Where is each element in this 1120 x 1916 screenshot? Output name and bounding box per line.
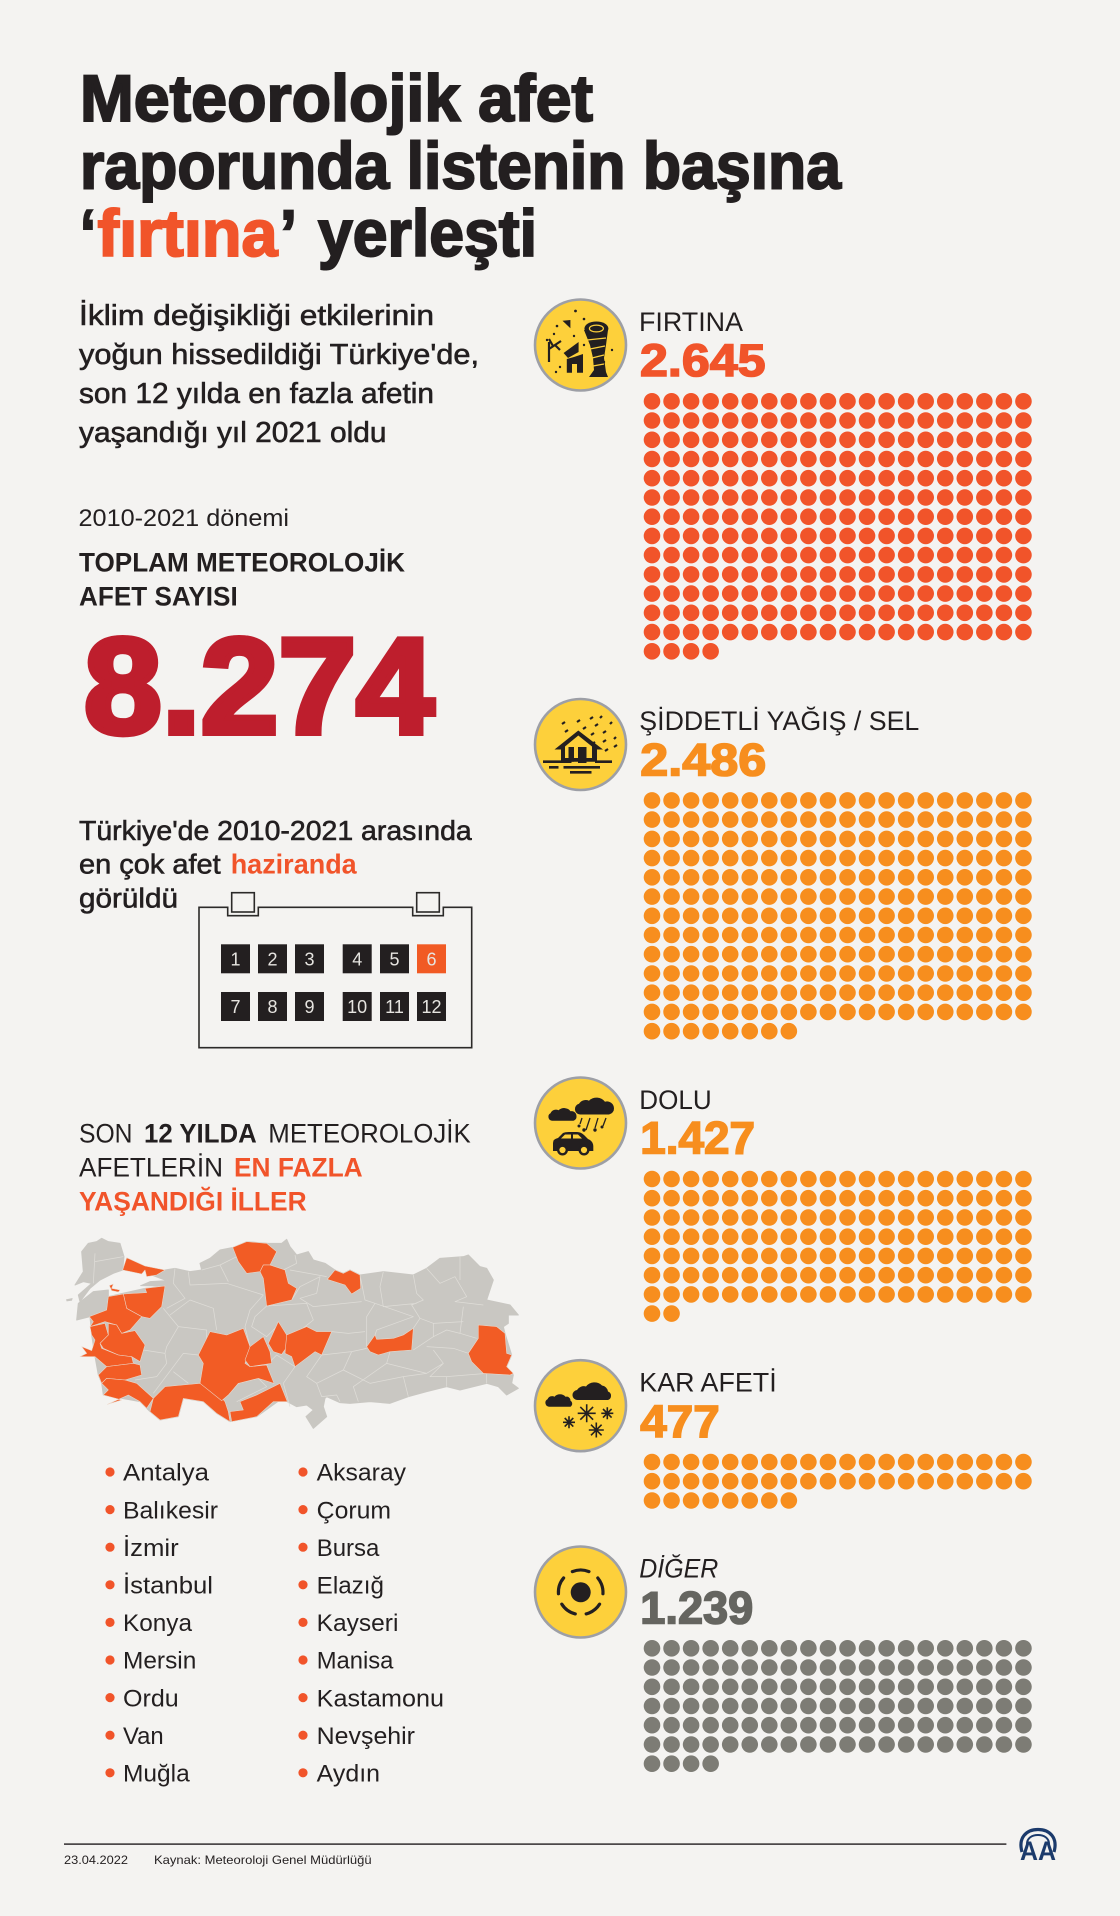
intro text block [79, 299, 479, 449]
label: storm: 2.645 [640, 335, 766, 386]
provinces list column 2: Manisa [317, 1648, 394, 1675]
june text block: görüldü [79, 882, 178, 913]
provinces heading: 12 YILDA [144, 1118, 257, 1148]
calendar: 5 [389, 949, 400, 969]
footer [64, 1843, 1006, 1867]
provinces list column 1: Balıkesir [123, 1497, 218, 1524]
provinces list column 1: İzmir [123, 1535, 179, 1562]
map of Turkey [66, 1238, 518, 1428]
provinces list column 1: Konya [123, 1610, 193, 1637]
label: heavy rain [639, 705, 919, 786]
label: other: DİĞER [639, 1552, 718, 1583]
title: ‘ [80, 196, 96, 270]
provinces heading: YAŞANDIĞI İLLER [79, 1186, 307, 1217]
provinces list column 2: Aydın [317, 1760, 380, 1788]
title: raporunda listenin başına [80, 128, 842, 202]
label: other [639, 1552, 753, 1634]
label: hail: DOLU [639, 1085, 712, 1115]
provinces heading: SON [79, 1118, 132, 1148]
provinces list column 1: Van [123, 1723, 164, 1750]
dot chart: other [652, 1648, 1024, 1764]
label: snow: 477 [640, 1396, 720, 1447]
provinces list column 1 [105, 1460, 218, 1788]
intro text block: yaşandığı yıl 2021 oldu [79, 417, 386, 449]
title: yerleşti [318, 196, 537, 270]
total heading: AFET SAYISI [79, 582, 238, 612]
calendar: 11 [385, 997, 404, 1017]
calendar: 1 [230, 949, 241, 969]
label: other: 1.239 [640, 1582, 753, 1634]
provinces list column 1: İstanbul [123, 1572, 213, 1600]
title: fırtına [98, 196, 279, 270]
label: storm [639, 307, 766, 386]
label: hail [639, 1085, 755, 1164]
logo: AA [1020, 1836, 1056, 1866]
label: snow [639, 1367, 777, 1447]
dot chart: storm [652, 401, 1024, 651]
dot chart: heavy rain [652, 800, 1024, 1031]
provinces list column 2: Nevşehir [317, 1723, 415, 1750]
calendar: 10 [347, 997, 367, 1017]
icon: flood house [535, 699, 626, 790]
provinces list column 1: Mersin [123, 1648, 196, 1675]
footer: Kaynak: Meteoroloji Genel Müdürlüğü [154, 1853, 372, 1867]
dot chart: snow [652, 1462, 1024, 1500]
total number: 8.274 [84, 610, 434, 762]
provinces list column 2: Aksaray [317, 1460, 406, 1487]
provinces list column 1: Muğla [123, 1760, 190, 1788]
calendar: 4 [352, 949, 362, 969]
calendar: 3 [304, 949, 315, 969]
icon: hail [535, 1078, 626, 1168]
calendar: 6 [426, 949, 437, 969]
provinces list column 2: Kayseri [317, 1610, 398, 1637]
period label: 2010-2021 dönemi [78, 505, 289, 532]
provinces heading: METEOROLOJİK [268, 1117, 471, 1148]
title [80, 61, 842, 270]
provinces list column 1: Ordu [123, 1685, 179, 1712]
intro text block: İklim değişikliği etkilerinin [79, 299, 434, 332]
provinces heading: EN FAZLA [234, 1153, 363, 1183]
label: hail: 1.427 [640, 1112, 755, 1164]
total heading [79, 548, 405, 612]
title: ’ [280, 196, 297, 270]
calendar: 12 [421, 997, 442, 1017]
provinces list column 1: Antalya [123, 1460, 210, 1487]
footer: 23.04.2022 [64, 1853, 128, 1867]
provinces heading [79, 1117, 471, 1217]
june text block [79, 815, 472, 913]
calendar [199, 893, 472, 1048]
calendar: 7 [230, 997, 241, 1017]
intro text block: son 12 yılda en fazla afetin [79, 378, 434, 410]
total heading: TOPLAM METEOROLOJİK [79, 548, 405, 578]
label: heavy rain: ŞİDDETLİ YAĞIŞ / SEL [639, 705, 919, 736]
icon: snow [535, 1360, 626, 1451]
provinces list column 2: Bursa [317, 1535, 380, 1562]
provinces list column 2: Elazığ [317, 1572, 384, 1600]
june text block: Türkiye'de 2010-2021 arasında [79, 815, 472, 846]
provinces list column 2: Kastamonu [317, 1685, 444, 1712]
intro text block: yoğun hissedildiği Türkiye'de, [79, 339, 479, 371]
icon: other [535, 1546, 626, 1638]
calendar: 2 [267, 949, 278, 969]
june text block: en çok afet [79, 848, 221, 879]
provinces list column 2: Çorum [317, 1497, 391, 1524]
label: heavy rain: 2.486 [640, 734, 766, 786]
calendar: 9 [304, 997, 315, 1017]
calendar: 8 [267, 997, 278, 1017]
june text block: haziranda [231, 848, 357, 879]
label: snow: KAR AFETİ [639, 1367, 777, 1398]
title: Meteorolojik afet [80, 61, 593, 135]
provinces heading: AFETLERİN [79, 1152, 223, 1183]
provinces list column 2 [298, 1460, 444, 1788]
icon: tornado [535, 300, 626, 390]
dot chart: hail [652, 1179, 1024, 1314]
label: storm: FIRTINA [639, 307, 743, 337]
